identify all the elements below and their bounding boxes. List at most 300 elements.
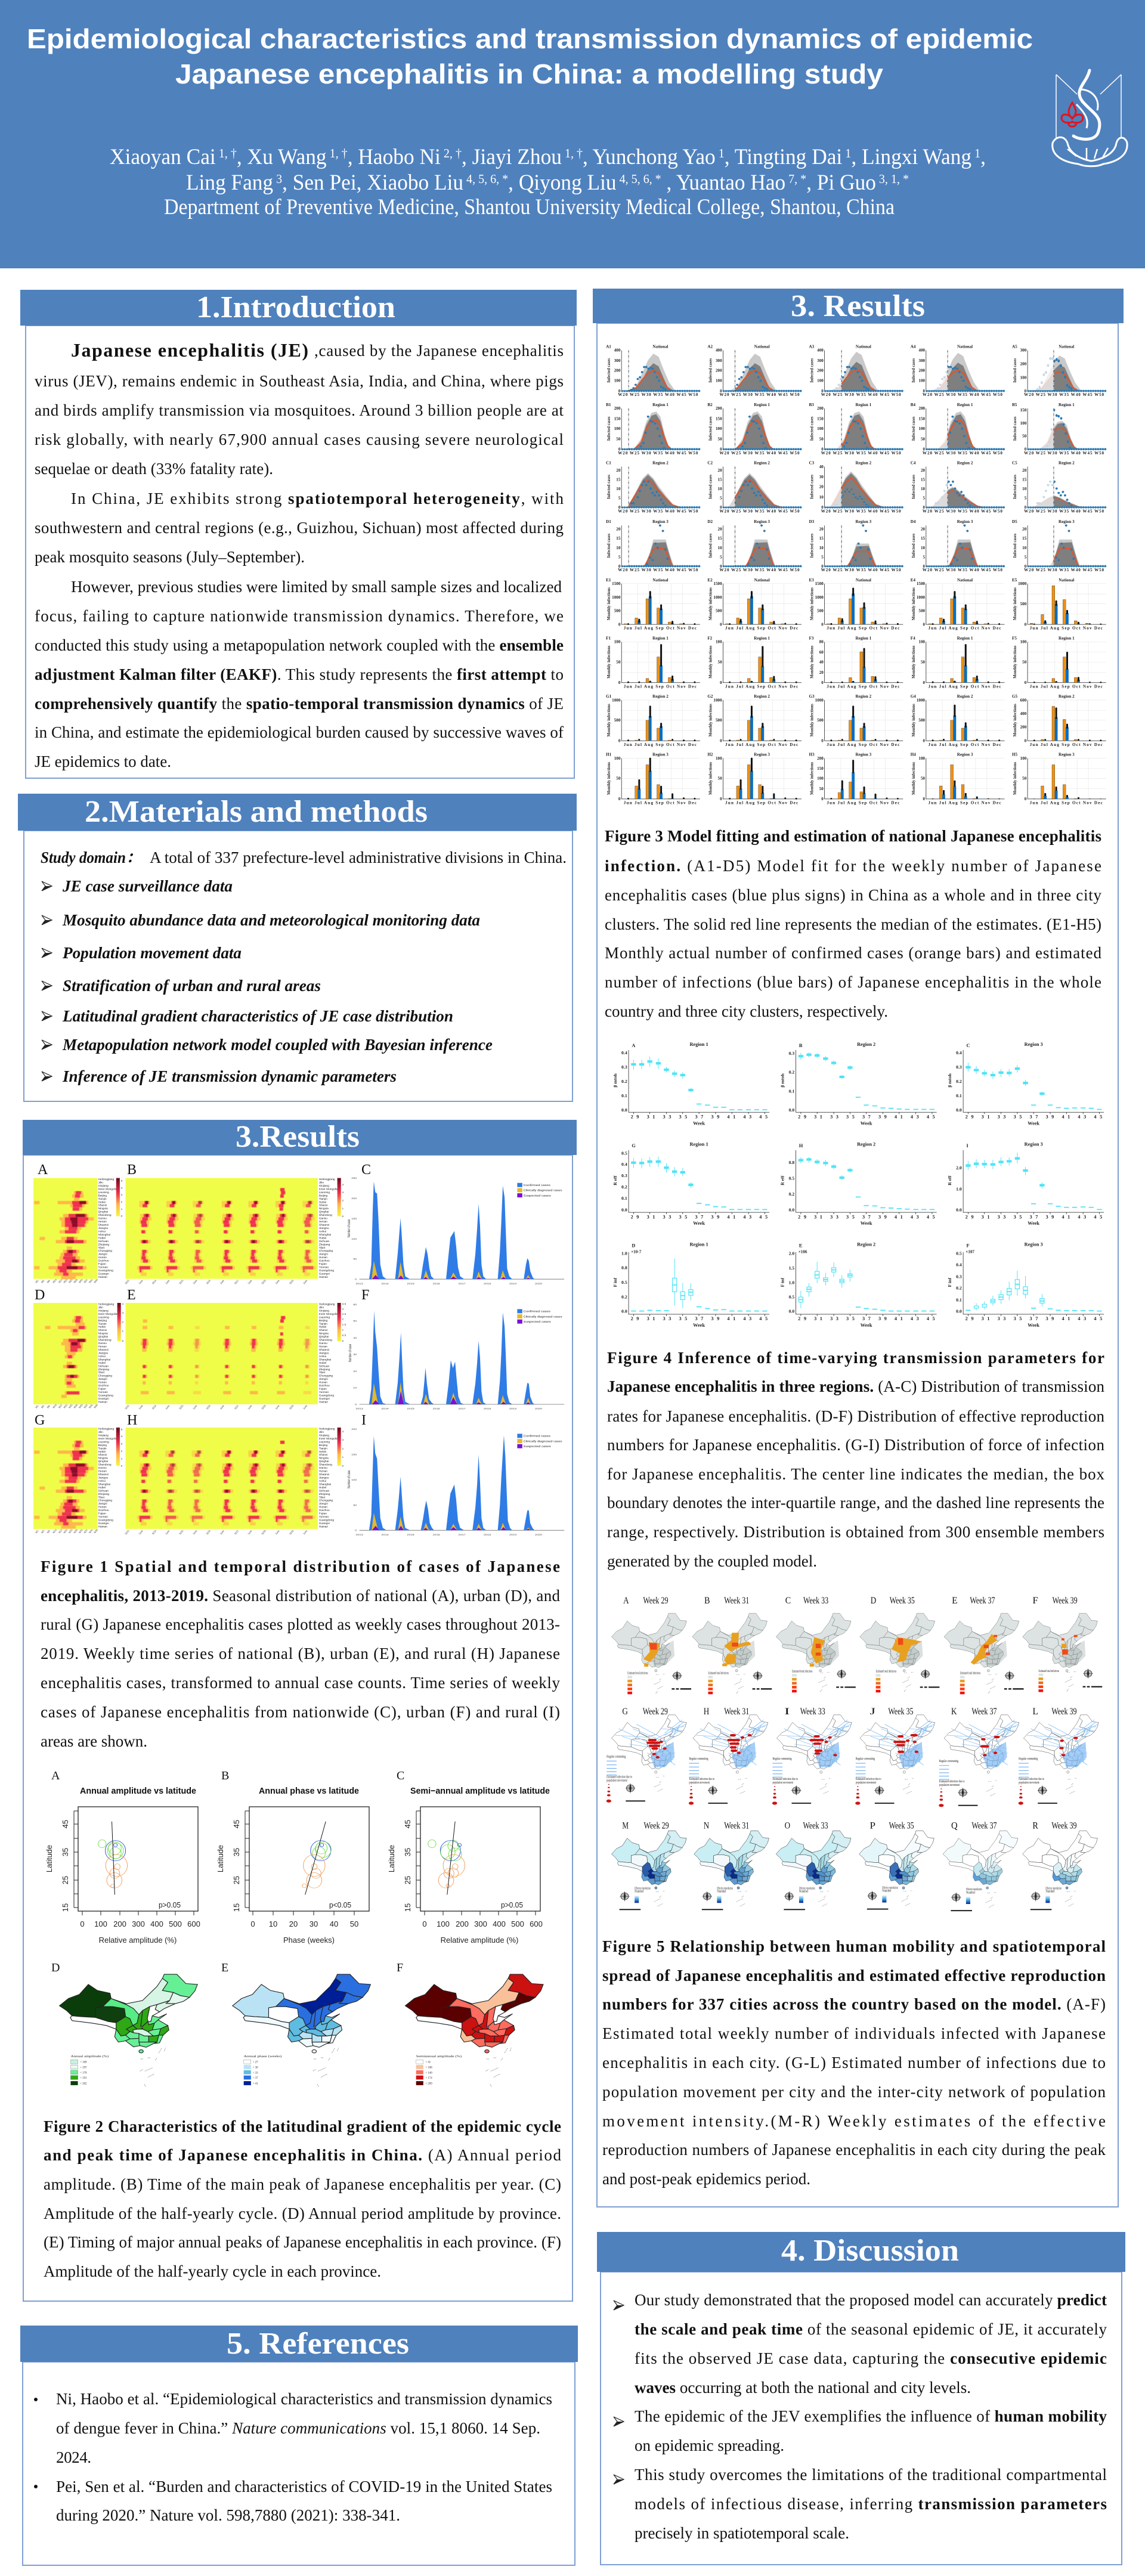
chart F3: 20 bbox=[819, 670, 824, 675]
heatmap B: June bbox=[247, 1279, 253, 1284]
heatmap A: W45 bbox=[93, 1278, 99, 1283]
bar chart F: Number of case bbox=[349, 1344, 353, 1362]
panel H effective reproduction region 2: 0.0 bbox=[789, 1207, 794, 1212]
text block: figure 1 caption: 2019. Weekly time series of national (B), urban (E), and rural (H) Japanese bbox=[41, 1645, 560, 1662]
chart E1: E1 bbox=[606, 578, 611, 583]
panel B transmission rate region 2: 0.1 bbox=[789, 1088, 794, 1094]
list: methods items: Latitudinal gradient characteristics of JE case distribution bbox=[62, 1007, 453, 1025]
chart A5: 100 bbox=[1020, 376, 1027, 380]
map E annual phase bbox=[233, 1974, 370, 2087]
scatter A bbox=[45, 1807, 200, 1945]
figure 1 charts: D bbox=[35, 1287, 45, 1303]
chart F3 bbox=[809, 636, 903, 689]
authors and affiliation: , Haobo Ni bbox=[348, 145, 441, 169]
scatter B: 30 bbox=[310, 1919, 318, 1928]
panel E force of infection region 2: F inf bbox=[779, 1277, 785, 1287]
heatmap A: Jiangsu bbox=[98, 1227, 108, 1230]
authors and affiliation: 1, † bbox=[216, 146, 237, 160]
heatmap A: Xinjiang bbox=[98, 1184, 109, 1188]
map B week 31 bbox=[692, 1595, 772, 1694]
heatmap E: 0 bbox=[342, 1340, 344, 1342]
heatmap D bbox=[33, 1302, 124, 1408]
panel C transmission rate region 3: 0.1 bbox=[956, 1093, 962, 1098]
heatmap H: 4 bbox=[342, 1431, 344, 1433]
bar chart F: 30 bbox=[353, 1353, 357, 1356]
list: discussion points: The epidemic of the JEV exemplifies the influence of human mobility bbox=[635, 2407, 1107, 2425]
heading: references: 5. References bbox=[227, 2327, 409, 2361]
bar chart C: 2013 bbox=[356, 1282, 363, 1285]
chart G5 bbox=[1012, 694, 1106, 747]
panel A transmission rate region 1: 0.4 bbox=[621, 1050, 627, 1055]
chart C1: Region 2 bbox=[652, 461, 669, 465]
panel G effective reproduction region 1 bbox=[612, 1142, 769, 1226]
chart D3: D3 bbox=[809, 519, 815, 524]
map F week 39: Week 39 bbox=[1053, 1595, 1078, 1606]
chart H1 bbox=[606, 753, 700, 805]
chart A3 bbox=[809, 344, 903, 397]
bar chart I: 0 bbox=[355, 1529, 357, 1532]
heatmap H: 1 bbox=[342, 1456, 344, 1459]
heatmap A: W21 bbox=[63, 1278, 69, 1283]
list: methods items: Stratification of urban and rural areas bbox=[63, 977, 321, 995]
map E week 37: Week 37 bbox=[970, 1595, 995, 1606]
map Q week 37: Week 37 bbox=[971, 1820, 997, 1831]
chart E1: 500 bbox=[614, 609, 621, 613]
chart B1: 50 bbox=[616, 436, 621, 441]
panel D force of infection region 1: Region 1 bbox=[690, 1241, 708, 1247]
heatmap H: 0 bbox=[342, 1465, 344, 1467]
panel: results right column bbox=[593, 289, 1124, 2207]
text block: introduction: comprehensively quantify the spatio-temporal transmission dynamics of JE bbox=[35, 695, 564, 713]
list: methods items: Metapopulation network model coupled with Bayesian inference bbox=[62, 1036, 493, 1054]
bar chart C: 0 bbox=[355, 1278, 357, 1281]
chart A5: 0 bbox=[1025, 389, 1027, 394]
authors and affiliation: Ling Fang bbox=[186, 171, 277, 195]
text block: figure 1 caption: cases of Japanese encephalitis from nationwide (C), urban (F) and rural (I) bbox=[41, 1703, 560, 1721]
scatter A: 100 bbox=[94, 1919, 107, 1928]
scatter C: Relative amplitude (%) bbox=[441, 1936, 518, 1945]
panel: materials and methods bbox=[18, 794, 577, 1101]
heatmap A: Shandong bbox=[98, 1213, 112, 1217]
map D annual amplitude: < 179 bbox=[80, 2071, 87, 2075]
chart H5 bbox=[1012, 753, 1106, 805]
figure 2 province maps: D bbox=[51, 1961, 60, 1974]
chart A2: A2 bbox=[707, 344, 713, 349]
panel G effective reproduction region 1: 0.5 bbox=[621, 1151, 627, 1156]
chart E5: E5 bbox=[1012, 578, 1017, 583]
text block: figure 4 caption: boundary denotes the inter-quartile range, and the dashed line represents the bbox=[607, 1494, 1104, 1512]
chart F1: 50 bbox=[616, 660, 621, 665]
chart C3: 0 bbox=[821, 505, 824, 510]
chart C1: 20 bbox=[616, 468, 621, 473]
chart C4: C4 bbox=[911, 461, 916, 465]
chart H3: 100 bbox=[817, 776, 824, 781]
map A week 29: A bbox=[623, 1595, 629, 1606]
chart C3: 30 bbox=[819, 475, 824, 479]
map E annual phase: Annual phase (weeks) bbox=[244, 2054, 282, 2058]
panel C transmission rate region 3: β mtoh bbox=[947, 1073, 952, 1088]
map A week 29 bbox=[611, 1595, 691, 1694]
chart G4: G4 bbox=[911, 694, 916, 699]
chart G1: 1000 bbox=[612, 698, 621, 702]
chart F3: 60 bbox=[819, 650, 824, 655]
text block: study domain: A total of 337 prefecture-level administrative divisions in China. bbox=[150, 849, 567, 866]
authors and affiliation: 4, 5, 6, * bbox=[617, 172, 661, 186]
scatter A: 45 bbox=[61, 1820, 70, 1828]
chart E2 bbox=[707, 578, 802, 631]
text block: references: Pei, Sen et al. “Burden and characteristics of COVID-19 in the United States bbox=[56, 2478, 552, 2496]
chart B4 bbox=[911, 402, 1005, 456]
panel D force of infection region 1: ×10-7 bbox=[631, 1249, 642, 1255]
chart F2: F2 bbox=[707, 636, 713, 640]
bar chart C: 2017 bbox=[459, 1282, 466, 1285]
text block: references: of dengue fever in China.” Nature communications vol. 15,1 8060. 14 Sep. bbox=[56, 2419, 540, 2437]
map F semiannual amplitude: < 108 bbox=[425, 2066, 432, 2070]
figure 1 charts: B bbox=[127, 1162, 137, 1178]
panel D force of infection region 1: 0.2 bbox=[621, 1295, 627, 1300]
panel B transmission rate region 2: 0.0 bbox=[789, 1107, 794, 1113]
map C week 33: C bbox=[785, 1595, 791, 1606]
heatmap A: Guangxi bbox=[98, 1272, 109, 1275]
chart F4: F4 bbox=[911, 636, 915, 640]
authors and affiliation: 1, † bbox=[327, 146, 348, 160]
maps M to O effective reproduction weeks 29 to 33 bbox=[611, 1820, 851, 1909]
text block: introduction: and birds amplify transmission via mosquitoes. Around 3 billion people are at bbox=[35, 401, 564, 419]
authors and affiliation: 7, * bbox=[785, 172, 806, 186]
authors and affiliation: , Xu Wang bbox=[237, 145, 327, 169]
chart A5: A5 bbox=[1012, 344, 1017, 349]
chart A1: 200 bbox=[614, 369, 621, 373]
heatmap A: Zhejiang bbox=[98, 1243, 109, 1246]
scatter A: p>0.05 bbox=[159, 1900, 181, 1909]
heatmap A: Tibet bbox=[98, 1246, 105, 1250]
heatmap A: Shaanxi bbox=[98, 1224, 109, 1227]
map O week 33: Week 33 bbox=[803, 1820, 828, 1831]
map D annual amplitude bbox=[60, 1974, 197, 2087]
panel I effective reproduction region 3: I bbox=[966, 1143, 968, 1148]
text block: figure 5 caption: spread of Japanese encephalitis and estimated effective reproduction bbox=[602, 1967, 1106, 1984]
chart B5: B5 bbox=[1012, 402, 1017, 407]
chart H1: 50 bbox=[616, 776, 621, 781]
map F semiannual amplitude: < 174 bbox=[425, 2076, 432, 2080]
list: methods items: JE case surveillance data bbox=[62, 877, 233, 895]
text block: figure 5 caption: and post-peak epidemics period. bbox=[602, 2170, 810, 2188]
panel A transmission rate region 1: 0.1 bbox=[621, 1093, 627, 1098]
text block: figure 5 caption: encephalitis in each city. (G-L) Estimated number of infections due to bbox=[602, 2054, 1106, 2072]
chart H3: 50 bbox=[819, 787, 824, 791]
panel I effective reproduction region 3 bbox=[947, 1142, 1104, 1226]
map D week 35 bbox=[860, 1595, 939, 1692]
chart G2: G2 bbox=[707, 694, 713, 699]
map R week 39 bbox=[1023, 1820, 1097, 1909]
map L week 39: Week 39 bbox=[1051, 1706, 1077, 1717]
chart A4 bbox=[911, 344, 1005, 397]
figure 2 scatter plots: C bbox=[397, 1769, 404, 1782]
chart C1 bbox=[606, 461, 700, 513]
panel G effective reproduction region 1: 0.0 bbox=[621, 1207, 627, 1212]
map C week 33 bbox=[776, 1595, 856, 1692]
title bbox=[27, 23, 1033, 89]
panel G effective reproduction region 1: G bbox=[632, 1143, 636, 1148]
heatmap A: W13 bbox=[52, 1278, 58, 1283]
chart H3: 0 bbox=[821, 797, 824, 801]
chart A1: National bbox=[652, 344, 669, 349]
authors and affiliation: Department of Preventive Medicine, Shantou University Medical College, Shantou, China bbox=[164, 195, 895, 219]
text block: figure 3 caption: infection. (A1-D5) Model fit for the weekly number of Japanese bbox=[605, 857, 1101, 875]
chart D1 bbox=[606, 519, 700, 572]
heatmap A: W33 bbox=[78, 1278, 84, 1283]
authors and affiliation: , Lingxi Wang bbox=[851, 145, 971, 169]
bar chart I: 200 bbox=[351, 1428, 357, 1431]
heatmap E: 1.5 bbox=[342, 1323, 346, 1326]
heatmap B: 2018 bbox=[261, 1279, 267, 1284]
text block: figure 2 caption: Amplitude of the half-yearly cycle in each province. bbox=[44, 2262, 381, 2280]
map F week 39: F bbox=[1032, 1595, 1038, 1606]
heatmap G: 4 bbox=[121, 1435, 123, 1438]
map G week 29: Regular commuting bbox=[606, 1754, 626, 1758]
bar chart C: 150 bbox=[351, 1218, 357, 1221]
chart F1: F1 bbox=[606, 636, 611, 640]
map F semiannual amplitude: Semiannual amplitude (%) bbox=[416, 2054, 462, 2058]
chart H3: 200 bbox=[817, 756, 824, 761]
panel E force of infection region 2: E bbox=[799, 1243, 803, 1248]
heatmap E: 2.5 bbox=[342, 1313, 346, 1315]
text block: figure 5 caption bbox=[602, 1937, 1106, 2188]
panel H effective reproduction region 2 bbox=[779, 1142, 937, 1226]
heatmap B: 2013 bbox=[124, 1279, 131, 1284]
heatmap A: Guangdong bbox=[98, 1269, 113, 1272]
heatmap B: 2016 bbox=[205, 1279, 212, 1284]
authors and affiliation: 1 bbox=[716, 146, 725, 160]
panel I effective reproduction region 3: 2.0 bbox=[956, 1165, 962, 1171]
chart B2 bbox=[707, 402, 802, 456]
chart G5: G5 bbox=[1012, 694, 1018, 699]
heatmap A: Henan bbox=[98, 1220, 107, 1224]
heatmap G: 2 bbox=[121, 1450, 123, 1453]
chart C3: 20 bbox=[819, 485, 824, 490]
panel B transmission rate region 2: 0.2 bbox=[789, 1070, 794, 1075]
bar chart C: 250 bbox=[351, 1177, 357, 1179]
scatter A: 25 bbox=[61, 1876, 70, 1884]
panel F force of infection region 3: 0.3 bbox=[956, 1274, 962, 1279]
chart F1: 0 bbox=[618, 680, 621, 685]
heading: discussion: 4. Discussion bbox=[781, 2234, 959, 2268]
heatmap D: 0 bbox=[122, 1340, 124, 1342]
chart B5: 100 bbox=[1020, 421, 1027, 426]
chart D1: 5 bbox=[618, 555, 621, 559]
map K week 37: Week 37 bbox=[971, 1706, 997, 1717]
map E annual phase: < 27 bbox=[253, 2060, 258, 2064]
chart B4: B4 bbox=[911, 402, 916, 407]
text block: introduction bbox=[35, 339, 564, 770]
bar chart C: 200 bbox=[351, 1197, 357, 1200]
map I week 33 bbox=[772, 1706, 852, 1803]
heatmap A: 0 bbox=[121, 1215, 123, 1217]
chart H4: H4 bbox=[911, 753, 916, 757]
chart E5: 500 bbox=[1020, 602, 1027, 606]
text block: figure 3 caption: Figure 3 Model fitting and estimation of national Japanese encephalitis bbox=[605, 827, 1101, 845]
chart F5 bbox=[1012, 636, 1106, 689]
heatmap A: W17 bbox=[57, 1278, 64, 1283]
text block: figure 1 caption: rural (G) Japanese encephalitis cases plotted as weekly cases throughout 2013- bbox=[41, 1615, 560, 1633]
panel D force of infection region 1: 0.0 bbox=[621, 1309, 627, 1314]
panel I effective reproduction region 3: R eff bbox=[947, 1175, 952, 1185]
text block: figure 4 caption: numbers for Japanese encephalitis. (G-I) Distribution of force of infection bbox=[607, 1436, 1104, 1454]
chart F3: F3 bbox=[809, 636, 814, 640]
map F semiannual amplitude: < 140 bbox=[425, 2071, 432, 2075]
list: discussion points: models of infectious disease, inferring transmission parameters bbox=[635, 2495, 1107, 2513]
map E annual phase: < 41 bbox=[253, 2082, 258, 2086]
panel C transmission rate region 3: 0.0 bbox=[956, 1107, 962, 1113]
heatmap B: 2015 bbox=[178, 1279, 184, 1284]
chart H1: 0 bbox=[618, 797, 621, 801]
panel H effective reproduction region 2: 0.5 bbox=[789, 1176, 794, 1181]
map Q week 37: Q bbox=[951, 1820, 958, 1831]
bar chart F: 40 bbox=[353, 1337, 357, 1340]
panel I effective reproduction region 3: Region 3 bbox=[1025, 1142, 1043, 1147]
heatmap E: 3 bbox=[342, 1308, 344, 1310]
bar chart C bbox=[347, 1177, 564, 1285]
panel F force of infection region 3: ×107 bbox=[965, 1249, 974, 1255]
chart H2 bbox=[707, 753, 802, 805]
list: discussion points: the scale and peak time of the seasonal epidemic of JE, it accurately bbox=[635, 2320, 1107, 2338]
panel B transmission rate region 2: B bbox=[799, 1043, 803, 1048]
text block: introduction: ,caused by the Japanese encephalitis bbox=[314, 342, 564, 360]
panel D force of infection region 1: 0.5 bbox=[621, 1280, 627, 1285]
panel E force of infection region 2: 1.5 bbox=[789, 1265, 794, 1271]
panel F force of infection region 3: 0.0 bbox=[956, 1309, 962, 1314]
map K week 37: K bbox=[951, 1706, 957, 1717]
authors and affiliation: , Yunchong Yao bbox=[583, 145, 716, 169]
chart B5 bbox=[1012, 402, 1106, 456]
bar chart I: 150 bbox=[351, 1453, 357, 1456]
map Q week 37 bbox=[943, 1820, 1018, 1911]
chart F3: 40 bbox=[819, 660, 824, 665]
chart C5: C5 bbox=[1012, 461, 1017, 465]
scatter C bbox=[387, 1807, 543, 1945]
heatmap A: Sichuan bbox=[98, 1240, 109, 1243]
authors and affiliation: 1 bbox=[842, 146, 851, 160]
chart G4 bbox=[911, 694, 1005, 747]
list: discussion points bbox=[614, 2291, 1107, 2542]
text block: figure 5 caption: movement intensity.(M-R) Weekly estimates of the effective bbox=[602, 2112, 1106, 2130]
chart H3 bbox=[809, 753, 903, 805]
text block: introduction: risk globally, with nearly 67,900 annual cases causing severe neurological bbox=[35, 431, 564, 448]
text block: study domain: Study domain： bbox=[41, 849, 141, 866]
chart D4: D4 bbox=[911, 519, 916, 524]
panel B transmission rate region 2: 0.3 bbox=[789, 1051, 794, 1056]
chart C1: 10 bbox=[616, 487, 621, 491]
chart F5: F5 bbox=[1012, 636, 1017, 640]
panel A transmission rate region 1: A bbox=[632, 1043, 635, 1048]
chart E1: 1000 bbox=[612, 595, 621, 600]
heatmap E: 0.5 bbox=[342, 1334, 346, 1336]
text block: introduction: adjustment Kalman filter (EAKF). This study represents the first attempt to bbox=[35, 665, 564, 683]
authors and affiliation: , Jiayi Zhou bbox=[462, 145, 562, 169]
text block: figure 3 caption: country and three city clusters, respectively. bbox=[605, 1002, 888, 1020]
chart H4 bbox=[911, 753, 1005, 805]
panel D force of infection region 1: 0.8 bbox=[621, 1265, 627, 1270]
text block: figure 3 caption: Monthly actual number of confirmed cases (orange bars) and estimated bbox=[605, 944, 1102, 962]
panel F force of infection region 3: 0.5 bbox=[956, 1250, 962, 1256]
heatmap A bbox=[33, 1178, 123, 1283]
heatmap A: Jiangxi bbox=[98, 1253, 107, 1256]
panel D force of infection region 1: F inf bbox=[612, 1277, 618, 1287]
scatter A: 500 bbox=[169, 1919, 182, 1928]
map N week 31: Week 31 bbox=[724, 1820, 749, 1831]
bar chart C: 2018 bbox=[484, 1282, 491, 1285]
panel H effective reproduction region 2: Region 2 bbox=[857, 1142, 875, 1147]
chart F1: 100 bbox=[614, 640, 621, 645]
map G week 29: Week 29 bbox=[643, 1706, 668, 1717]
chart F4 bbox=[911, 636, 1005, 689]
chart C3: 40 bbox=[819, 465, 824, 469]
map A week 29: Estimated total infections bbox=[627, 1671, 648, 1675]
text block: introduction: southwestern and central regions (e.g., Guizhou, Sichuan) most affected during bbox=[35, 519, 564, 537]
panel A transmission rate region 1: β mtoh bbox=[612, 1073, 618, 1088]
heatmap D: 1 bbox=[122, 1330, 124, 1332]
list: discussion points: precisely in spatiotemporal scale. bbox=[635, 2524, 849, 2542]
map K week 37 bbox=[939, 1706, 1019, 1806]
heatmap E: 3.5 bbox=[342, 1303, 346, 1305]
panel: results left column bbox=[23, 1120, 577, 2301]
panel F force of infection region 3: 0.4 bbox=[956, 1262, 962, 1268]
map G week 29 bbox=[606, 1706, 686, 1801]
chart H5: H5 bbox=[1012, 753, 1018, 757]
text block: references: 2024. bbox=[56, 2448, 91, 2466]
heatmap B bbox=[124, 1178, 344, 1284]
authors and affiliation: 4, 5, 6, * bbox=[463, 172, 508, 186]
chart F3: 80 bbox=[819, 640, 824, 645]
chart A5: 200 bbox=[1020, 362, 1027, 367]
panel B transmission rate region 2 bbox=[779, 1042, 937, 1126]
bar chart C: 2020 bbox=[535, 1282, 543, 1285]
text block: figure 4 caption: Figure 4 Inference of time-varying transmission parameters for bbox=[607, 1349, 1104, 1367]
heatmap A: Yunnan bbox=[98, 1266, 108, 1270]
chart D1: D1 bbox=[606, 519, 611, 524]
panel E force of infection region 2: 0.5 bbox=[789, 1295, 794, 1300]
bar chart I: 100 bbox=[351, 1479, 357, 1482]
heading: results: 3. Results bbox=[791, 289, 925, 323]
chart E5: 0 bbox=[1025, 623, 1027, 627]
heatmap A: W41 bbox=[88, 1278, 94, 1283]
chart C1: C1 bbox=[606, 461, 611, 465]
chart E2: E2 bbox=[707, 578, 713, 583]
chart E1 bbox=[606, 578, 700, 631]
heatmap B: 2014 bbox=[151, 1279, 157, 1284]
bar chart C: 2019 bbox=[509, 1282, 517, 1285]
heatmap G: 0 bbox=[121, 1465, 123, 1467]
text block: figure 1 caption: encephalitis, 2013-2019. Seasonal distribution of national (A), urban (D), and bbox=[41, 1587, 561, 1605]
panel F force of infection region 3: Region 3 bbox=[1025, 1241, 1043, 1247]
panel: introduction bbox=[20, 290, 577, 778]
heatmap A: Gansu bbox=[98, 1217, 107, 1221]
list: discussion points: on epidemic spreading. bbox=[635, 2436, 784, 2454]
map G week 29: G bbox=[622, 1706, 628, 1717]
panel E force of infection region 2: 0.0 bbox=[789, 1309, 794, 1314]
map N week 31 bbox=[694, 1820, 769, 1909]
panel A transmission rate region 1: 29 31 33 35 37 39 41 43 45 bbox=[631, 1114, 768, 1119]
authors and affiliation: 3, 1, * bbox=[876, 172, 909, 186]
figure 1 charts: C bbox=[361, 1162, 371, 1178]
heatmap B: 3 bbox=[342, 1191, 344, 1194]
text block: introduction: virus (JEV), remains endemic in Southeast Asia, India, and China, where pigs bbox=[35, 372, 564, 390]
chart B1: B1 bbox=[606, 402, 611, 407]
bar chart F: 0 bbox=[355, 1403, 357, 1406]
heatmap B: 2 bbox=[342, 1199, 344, 1202]
heatmap A: Inner Mongolia bbox=[98, 1187, 117, 1191]
figure 2 province maps: F bbox=[397, 1961, 403, 1974]
